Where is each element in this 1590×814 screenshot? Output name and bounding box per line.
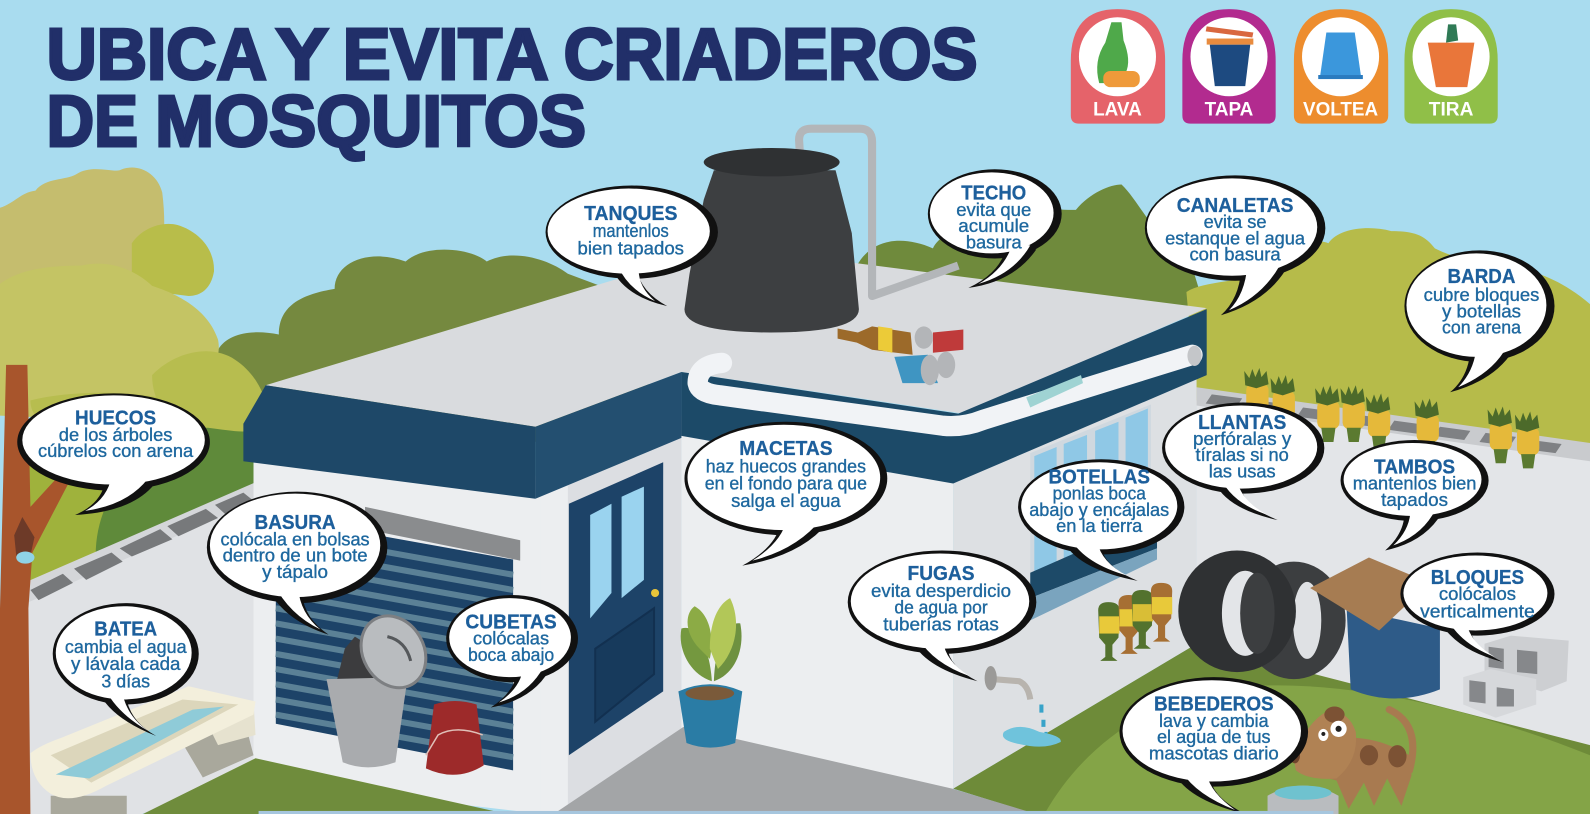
red bucket <box>426 701 484 775</box>
dog snout <box>1290 747 1300 763</box>
title word Y: Y <box>276 15 329 95</box>
front tire hole <box>1222 571 1269 656</box>
callout: huecos: cúbrelos con arena <box>38 440 194 461</box>
bottle four <box>1151 583 1172 642</box>
tree trunk <box>0 365 71 814</box>
cardboard cover <box>1310 558 1430 631</box>
callout: cubetas: CUBETAS <box>465 611 557 633</box>
title word UBICA: UBICA <box>47 15 267 95</box>
callout: barda: cubre bloques <box>1424 284 1539 305</box>
bucket body <box>426 701 484 775</box>
dog tail <box>1389 710 1413 770</box>
house <box>143 129 1207 814</box>
water drum <box>1310 558 1440 698</box>
garbage bin <box>327 604 439 767</box>
callout: macetas: en el fondo para que <box>705 473 867 494</box>
callout: bebederos: mascotas diario <box>1149 742 1279 763</box>
badge: voltea: VOLTEA <box>1303 100 1378 121</box>
callout: macetas <box>684 422 887 566</box>
bowl water <box>1275 786 1331 800</box>
front tire <box>1178 550 1296 672</box>
callout: huecos: HUECOS <box>75 408 156 430</box>
callout: canaletas: evita se <box>1204 211 1267 232</box>
tree canopy lower <box>152 351 267 431</box>
right wall blocks <box>1197 387 1590 461</box>
right garden wall <box>1197 400 1590 750</box>
callout: batea: 3 días <box>101 670 150 691</box>
badge: tira: TIRA <box>1429 100 1473 121</box>
bottles on wall <box>1244 368 1539 468</box>
badge: tapa <box>1182 9 1276 124</box>
can red <box>933 329 963 353</box>
bottle label <box>878 326 892 353</box>
leaf top left <box>688 606 711 659</box>
callout: botellas: BOTELLAS <box>1049 467 1150 489</box>
dog head <box>1293 711 1356 779</box>
callout: fugas: de agua por <box>894 596 988 617</box>
callout: basura <box>207 492 387 635</box>
gutter <box>698 355 1192 426</box>
can blue <box>894 355 938 383</box>
callout: fugas: FUGAS <box>908 563 974 585</box>
basin cream leg <box>208 701 256 745</box>
title word EVITA: EVITA <box>343 15 549 95</box>
olive hill right <box>1186 228 1590 466</box>
basin inner wall <box>51 699 238 783</box>
callout: llantas: tíralas si no <box>1196 444 1289 465</box>
callout: botellas <box>1018 459 1184 581</box>
callout: batea: y lávala cada <box>71 653 181 674</box>
gutter end cap <box>1187 346 1202 366</box>
leaf top right <box>710 598 736 669</box>
callout: canaletas: CANALETAS <box>1177 195 1293 217</box>
left wall block holes <box>30 493 254 600</box>
door lower panel <box>595 608 654 722</box>
callout: fugas: evita desperdicio <box>871 580 1011 601</box>
callout: bebederos: BEBEDEROS <box>1154 694 1274 716</box>
callout: fugas: tuberías rotas <box>883 614 999 635</box>
front wall centre <box>681 416 953 801</box>
callout: bloques: BLOQUES <box>1431 567 1524 589</box>
callout: bebederos: lava y cambia <box>1159 710 1269 731</box>
back tire <box>1242 562 1346 679</box>
puddle <box>1003 727 1061 747</box>
window panes <box>1034 409 1148 575</box>
callout: barda <box>1404 250 1555 392</box>
tree canopy beige <box>0 168 164 345</box>
callout: batea <box>53 603 199 736</box>
windows <box>1030 404 1157 620</box>
callout: tambos: mantenlos bien <box>1353 473 1476 494</box>
window sill base <box>1030 548 1157 620</box>
ground right dark grass <box>953 644 1590 814</box>
left garden wall <box>25 497 254 814</box>
cement blocks <box>1463 636 1569 718</box>
drum body <box>1347 608 1440 698</box>
title word MOSQUITOS: MOSQUITOS <box>155 82 586 162</box>
tree canopy bottom <box>30 393 175 431</box>
callout: basura: dentro de un bote <box>223 545 368 566</box>
callout: tanques <box>546 186 718 306</box>
callout: basura: BASURA <box>255 512 336 534</box>
dog spots <box>1360 745 1407 767</box>
corner wall <box>540 416 681 814</box>
badge: tapa: TAPA <box>1205 100 1253 121</box>
tank rim <box>704 148 840 176</box>
callout: botellas: abajo y encájalas <box>1029 499 1169 520</box>
water bowl <box>1268 786 1339 814</box>
tap and leak <box>985 666 1061 747</box>
callout: botellas: ponlas boca <box>1053 483 1147 504</box>
callout: huecos <box>17 393 210 515</box>
callout: canaletas: con basura <box>1189 244 1282 265</box>
callout: tambos: TAMBOS <box>1374 456 1455 478</box>
basin rim <box>30 686 256 798</box>
water tank pipe <box>799 129 958 296</box>
tire hole shade <box>1240 573 1275 654</box>
callout: basura: colócala en bolsas <box>221 528 370 549</box>
callout: llantas <box>1162 402 1324 520</box>
door pane left <box>590 504 611 618</box>
bottle one <box>1098 602 1119 661</box>
water drops <box>1039 705 1047 738</box>
can end <box>921 355 939 385</box>
flower pot <box>678 598 742 748</box>
left lawn <box>143 758 507 814</box>
door <box>569 462 663 755</box>
callout: macetas: salga el agua <box>731 490 841 511</box>
garbage bag <box>335 637 406 689</box>
basin legs <box>51 716 254 814</box>
callout: cubetas: boca abajo <box>468 644 554 665</box>
corner fascia <box>535 372 681 499</box>
back tire hole <box>1293 582 1321 659</box>
bowl body <box>1268 786 1339 814</box>
callout: tanques: TANQUES <box>584 203 677 225</box>
hollow in tree <box>14 517 34 556</box>
callout: bebederos <box>1119 677 1308 814</box>
dog body <box>1318 738 1412 809</box>
bin lid <box>348 604 439 699</box>
callout: cubetas: colócalas <box>473 628 549 649</box>
bin body <box>327 677 408 767</box>
callout: llantas: las usas <box>1209 460 1276 481</box>
block holes <box>1469 647 1537 707</box>
bottle two <box>1118 595 1140 654</box>
callout: bloques <box>1400 552 1555 662</box>
bottles in ground <box>1098 583 1172 661</box>
callout: batea: BATEA <box>94 619 157 641</box>
tap flange <box>985 666 997 690</box>
dark hedge left <box>96 405 254 568</box>
leaf right low <box>714 623 742 681</box>
badge: voltea <box>1294 9 1388 124</box>
door knob <box>651 589 659 597</box>
callout: tambos: tapados <box>1381 489 1448 510</box>
badge: tira <box>1404 9 1498 124</box>
right wall block holes <box>1206 394 1562 453</box>
callout: llantas: LLANTAS <box>1198 412 1286 434</box>
dog <box>1290 707 1413 809</box>
shutter slats <box>276 532 513 757</box>
callout: botellas: en la tierra <box>1056 515 1143 536</box>
callout: techo: TECHO <box>961 183 1026 205</box>
callout: techo <box>928 169 1062 288</box>
roller shutter <box>276 517 513 770</box>
callout: tambos <box>1341 440 1489 550</box>
right wall <box>953 365 1197 789</box>
batea washbasin <box>30 686 256 814</box>
callout: techo: acumule <box>958 215 1029 236</box>
leaves in gutter <box>1026 375 1083 408</box>
callout: macetas: MACETAS <box>739 438 833 460</box>
bucket handle <box>426 730 483 755</box>
callout: barda: con arena <box>1442 317 1522 338</box>
callout: batea: cambia el agua <box>65 636 187 657</box>
callout: barda: BARDA <box>1448 266 1516 288</box>
window frame <box>1030 404 1151 598</box>
callout: fugas <box>848 550 1036 681</box>
basin water <box>56 707 224 779</box>
callout: techo: basura <box>966 231 1022 252</box>
legend badges <box>1071 9 1498 124</box>
callout: cubetas <box>446 595 578 708</box>
shutter awning <box>365 507 520 561</box>
tank body <box>684 170 859 332</box>
title word CRIADEROS: CRIADEROS <box>564 15 978 95</box>
badge: lava: LAVA <box>1093 100 1142 121</box>
bin lid handle <box>387 637 411 661</box>
lower block <box>1463 669 1536 718</box>
front wall left <box>254 446 543 814</box>
bottle three <box>1132 590 1153 649</box>
callout: huecos: de los árboles <box>59 424 172 445</box>
bottom edge strip <box>259 811 1333 814</box>
tires <box>1178 550 1346 679</box>
olive field left <box>25 405 254 603</box>
callout: barda: y botellas <box>1442 300 1521 321</box>
soil <box>685 686 734 700</box>
tap <box>994 679 1030 699</box>
roof <box>266 246 1207 427</box>
upper block <box>1485 636 1569 691</box>
water tank <box>684 148 859 332</box>
callout: canaletas <box>1145 175 1325 315</box>
title word DE: DE <box>47 82 138 162</box>
tree canopy light <box>0 264 219 421</box>
garbage on roof <box>838 326 963 385</box>
callout: canaletas: estanque el agua <box>1165 227 1306 248</box>
callout: tanques: bien tapados <box>577 237 684 258</box>
left wall blocks <box>25 482 259 603</box>
bottle <box>838 326 913 355</box>
window sill <box>1030 517 1157 598</box>
trees <box>0 168 267 431</box>
lit edge of corner wall <box>540 476 568 814</box>
leaf left low <box>681 628 712 681</box>
right fascia <box>681 309 1207 484</box>
water in tree hollow <box>16 551 34 564</box>
callout: tanques: mantenlos <box>593 220 669 241</box>
badge: lava <box>1071 9 1165 124</box>
callout: llantas: perfóralas y <box>1193 428 1292 449</box>
tree canopy olive small <box>132 224 214 296</box>
callout: basura: y tápalo <box>262 561 328 582</box>
dog pupils <box>1321 726 1342 736</box>
dog ear <box>1324 707 1345 723</box>
ground right light grass <box>1044 685 1590 814</box>
door pane right <box>622 487 644 598</box>
callout: bloques: verticalmente <box>1420 600 1535 621</box>
callout: bloques: colócalos <box>1439 583 1516 604</box>
hedge behind roof right <box>857 184 1207 314</box>
callout: bebederos: el agua de tus <box>1157 726 1271 747</box>
title <box>47 15 978 162</box>
driveway <box>554 727 1036 814</box>
hedge behind house left <box>218 250 649 487</box>
callout: techo: evita que <box>956 199 1031 220</box>
callout: macetas: haz huecos grandes <box>706 455 866 476</box>
dog eyes <box>1318 721 1347 741</box>
left fascia <box>243 385 535 499</box>
pot <box>678 684 742 748</box>
can gray lids <box>915 326 955 378</box>
